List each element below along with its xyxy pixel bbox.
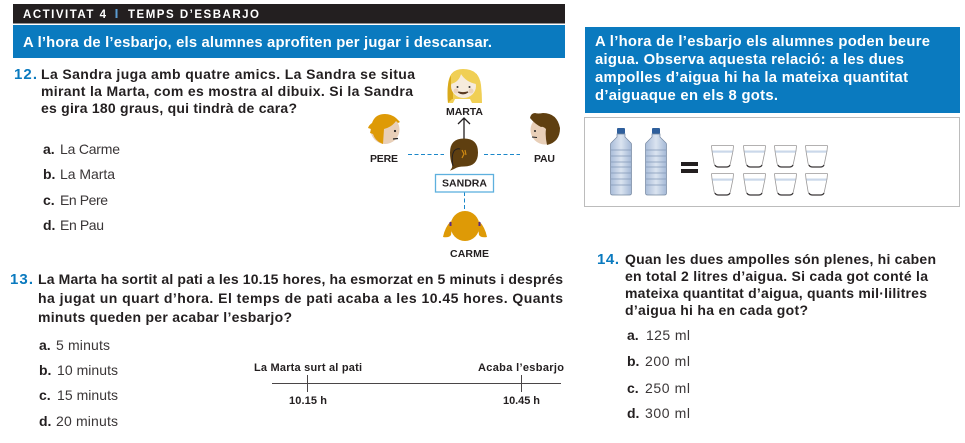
arrow towards Marta bbox=[458, 118, 470, 139]
question 12 options: d. bbox=[43, 217, 55, 233]
question 13: minuts queden per acabar l’esbarjo? bbox=[38, 309, 292, 325]
question 14: 14. bbox=[597, 251, 619, 268]
question 13 options: b. bbox=[39, 362, 51, 378]
question 13 options: a. bbox=[39, 337, 51, 353]
question 14 options: b. bbox=[627, 353, 639, 369]
question 12 options bbox=[43, 141, 120, 233]
equals sign bbox=[681, 164, 698, 171]
activity header bar bbox=[13, 4, 565, 24]
question 14 bbox=[597, 251, 936, 318]
question 13 options bbox=[39, 337, 118, 429]
question 12 options: La Carme bbox=[60, 141, 120, 157]
intro banner bbox=[13, 25, 565, 58]
label: Pau: PAU bbox=[534, 153, 555, 165]
connecting dashed lines bbox=[408, 154, 520, 211]
question 13 options: 5 minuts bbox=[56, 337, 110, 353]
question 13 options: d. bbox=[39, 413, 51, 429]
question 12 options: b. bbox=[43, 166, 55, 182]
label: Carme: CARME bbox=[450, 248, 489, 260]
question 12 options: En Pere bbox=[60, 192, 108, 208]
question 13 options: 20 minuts bbox=[56, 413, 118, 429]
question 13: 13. bbox=[10, 271, 33, 288]
icon: Sandra seen from behind bbox=[450, 138, 478, 170]
question 14 options: c. bbox=[627, 380, 639, 396]
question 14 options: a. bbox=[627, 327, 639, 343]
question 12 options: En Pau bbox=[60, 217, 104, 233]
icon: Marta bbox=[448, 69, 482, 103]
water panel text: A l’hora de l’esbarjo els alumnes poden beure bbox=[595, 34, 930, 50]
question 13 bbox=[10, 271, 563, 325]
diagram: children positions bbox=[368, 69, 560, 260]
label: Marta: MARTA bbox=[446, 106, 483, 118]
question 14 options: 125 ml bbox=[646, 327, 690, 343]
question 13 options: 15 minuts bbox=[57, 387, 118, 403]
icon: Carme seen from behind bbox=[443, 211, 487, 241]
question 14: d’aigua hi ha en cada got? bbox=[625, 302, 808, 318]
question 12: es gira 180 graus, qui tindrà de cara? bbox=[41, 100, 297, 116]
question 13: La Marta ha sortit al pati a les 10.15 hores, ha esmorzat en 5 minuts i després bbox=[38, 271, 563, 287]
label: Sandra bbox=[436, 174, 494, 192]
water panel text: d’aiguaque en els 8 gots. bbox=[595, 88, 778, 104]
water panel text: aigua. Observa aquesta relació: a les dues bbox=[595, 52, 904, 68]
intro banner: A l’hora de l’esbarjo, els alumnes aprofiten per jugar i descansar. bbox=[23, 35, 492, 51]
label: Sandra: SANDRA bbox=[442, 178, 487, 190]
icon: eight cups bbox=[712, 146, 828, 195]
timeline: Acaba l’esbarjo bbox=[478, 362, 564, 374]
activity header bar: ACTIVITAT 4 bbox=[23, 9, 107, 21]
question 14 options: d. bbox=[627, 405, 639, 421]
icon: bottles bbox=[610, 128, 666, 195]
question 14: Quan les dues ampolles són plenes, hi caben bbox=[625, 251, 936, 267]
label: Pere: PERE bbox=[370, 153, 398, 165]
question 14 options bbox=[627, 327, 690, 421]
icon: Pau bbox=[530, 113, 560, 145]
timeline: 10.15 h bbox=[289, 395, 327, 407]
question 14: en total 2 litres d’aigua. Si cada got conté la bbox=[625, 268, 928, 284]
question 12: mirant la Marta, com es mostra al dibuix. Si la Sandra bbox=[41, 83, 413, 99]
timeline bbox=[254, 362, 564, 407]
question 12 options: La Marta bbox=[60, 166, 115, 182]
question 13 options: c. bbox=[39, 387, 51, 403]
question 12: La Sandra juga amb quatre amics. La Sandra se situa bbox=[41, 66, 415, 82]
question 13: ha jugat un quart d’hora. El temps de pati acaba a les 10.45 hores. Quants bbox=[38, 290, 563, 306]
question 14: mateixa quantitat d’aigua, quants mil·lilitres bbox=[625, 285, 927, 301]
question 14 options: 300 ml bbox=[645, 405, 690, 421]
question 12 options: a. bbox=[43, 141, 55, 157]
question 12: 12. bbox=[14, 66, 37, 83]
question 13 options: 10 minuts bbox=[57, 362, 118, 378]
water panel text bbox=[585, 27, 960, 113]
icon: Pere bbox=[368, 114, 400, 144]
activity header bar: TEMPS D’ESBARJO bbox=[128, 9, 259, 21]
question 14 options: 250 ml bbox=[645, 380, 690, 396]
timeline: La Marta surt al pati bbox=[254, 362, 362, 374]
question 12 bbox=[14, 66, 415, 116]
bottles and cups relation bbox=[584, 118, 960, 206]
timeline: 10.45 h bbox=[503, 395, 540, 407]
water panel text: ampolles d’aigua hi ha la mateixa quantitat bbox=[595, 70, 908, 86]
question 14 options: 200 ml bbox=[645, 353, 690, 369]
question 12 options: c. bbox=[43, 192, 55, 208]
